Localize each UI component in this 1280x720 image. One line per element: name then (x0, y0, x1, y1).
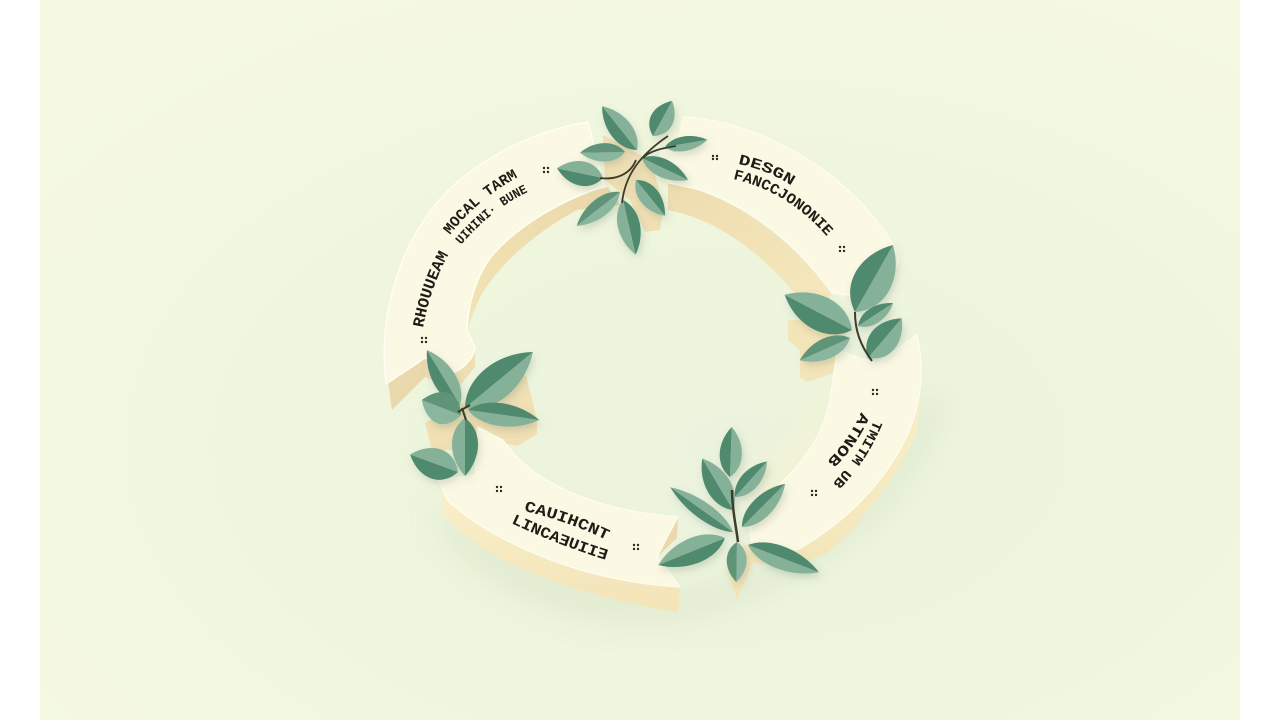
notch wall: bottom arrow head (657, 516, 678, 557)
back wall: top-left inner side (467, 187, 620, 332)
warm glow inside ring (745, 380, 838, 510)
dot markers (421, 155, 878, 550)
notch wall: top-left arrow end (388, 358, 425, 410)
label: right text: TMITM UB (834, 423, 882, 488)
top face: right panel (748, 335, 921, 550)
block: small tab beside top leaves (673, 130, 692, 165)
icon: bottom leaf cluster (653, 427, 823, 583)
top face: research panel (384, 122, 604, 384)
inner wall: top-right (668, 183, 832, 320)
icon: right leaf cluster (777, 236, 912, 370)
top face: bottom panel (439, 427, 680, 587)
label: research text (412, 169, 528, 327)
block: base piece under right leaves (788, 320, 850, 382)
segment: top-right arrow (603, 116, 900, 382)
segment: top-left arrow (384, 121, 620, 410)
segment: right arrow (728, 334, 923, 600)
block: base piece under left leaves (425, 375, 537, 450)
label: right text: ATNOB (828, 412, 868, 466)
block wall: top-left arrow head (425, 347, 475, 392)
label: design text: DESGN (739, 154, 796, 185)
block: base piece under top leaves (603, 135, 664, 232)
top face: design panel (660, 117, 899, 300)
ring soft shadow (440, 390, 945, 622)
outer wall: right (728, 362, 923, 600)
label: research text: RHOUUEAM (412, 250, 448, 327)
label: research text: UIHINI· BUNE (455, 184, 528, 244)
label: bottom text: CAUIHCNT (526, 502, 610, 538)
label: research text: MOCAL TARM (442, 169, 518, 234)
label: design text: FANCCJONONIE (734, 170, 834, 236)
icon: left leaf cluster (405, 339, 544, 486)
icon: top leaf cluster (554, 95, 709, 257)
segment: bottom arrow (425, 375, 681, 612)
outer wall: bottom (440, 482, 680, 612)
label: bottom text: LINCAƎUIIƎ (512, 514, 608, 560)
